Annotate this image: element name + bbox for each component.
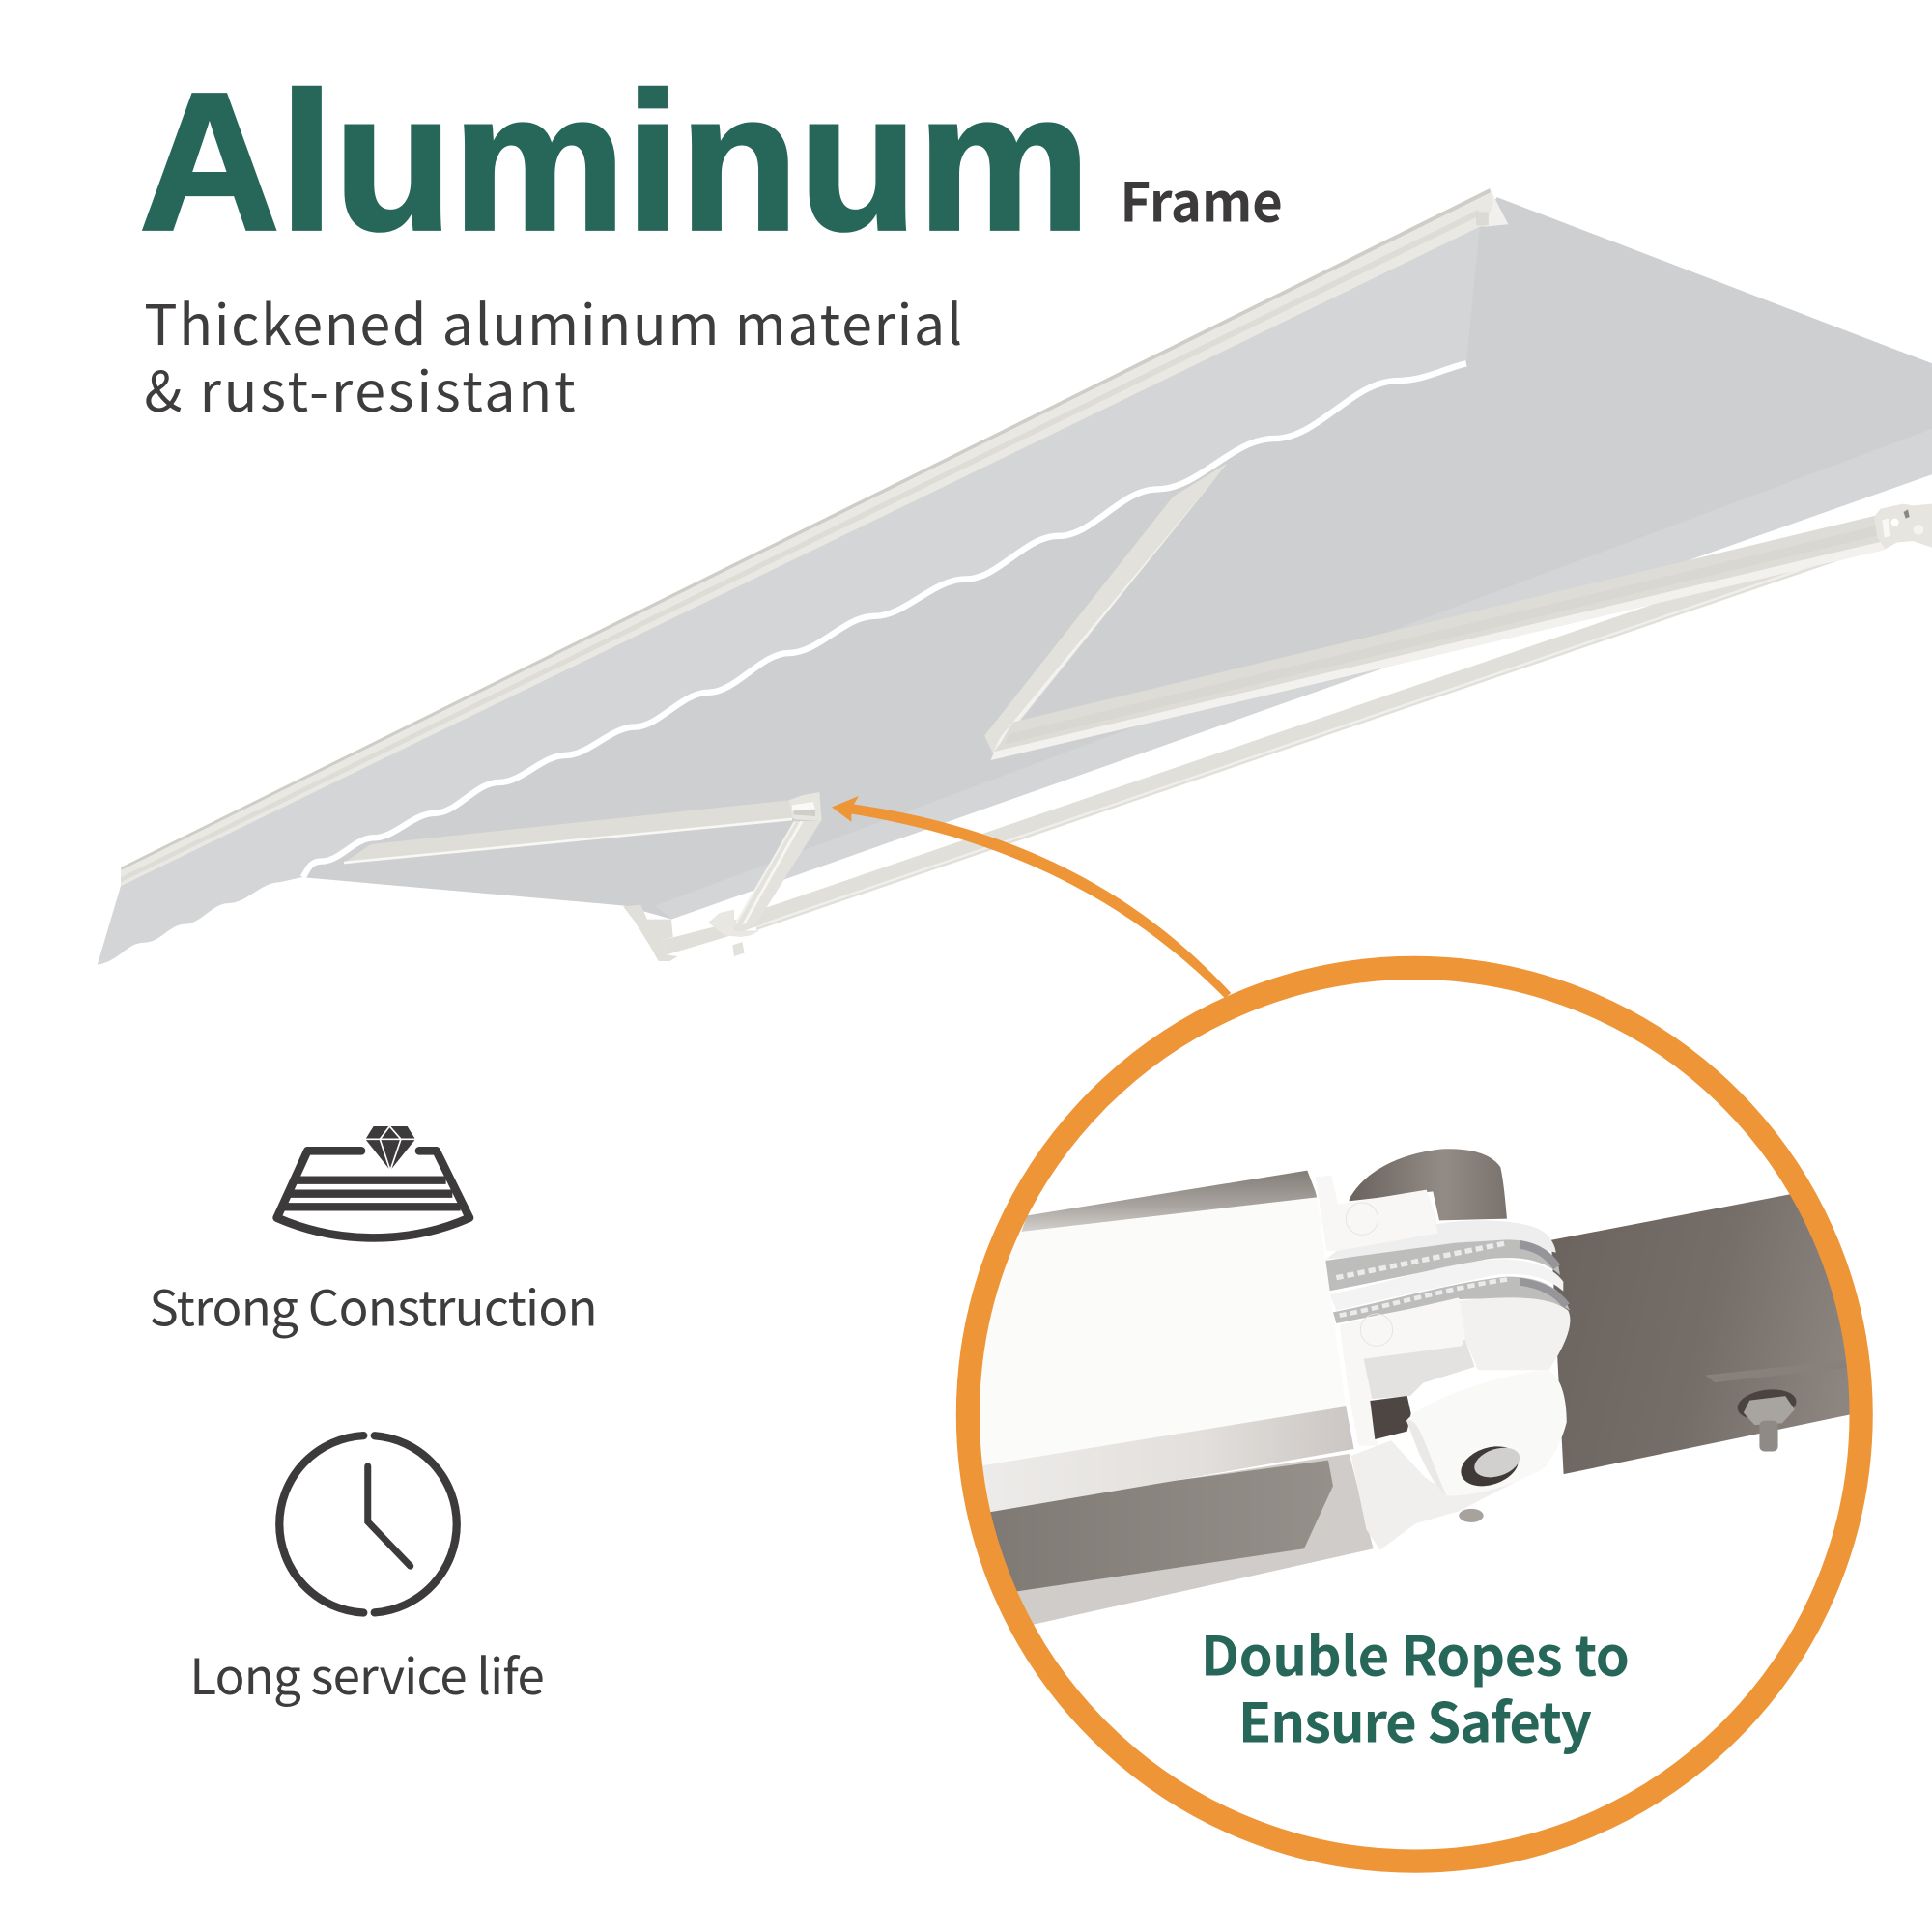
label: long service life: Long service life [189,1637,545,1709]
lower rail [754,525,1886,930]
zoom photo of elbow joint [973,1149,1878,1625]
joint plates and steel ropes [1316,1149,1570,1446]
description: & rust-resistant [144,347,576,428]
icon: clock [279,1435,457,1613]
caption: double ropes: Ensure Safety [1238,1681,1592,1759]
mount plate [732,942,745,956]
elbow [789,792,822,821]
strut [732,821,821,930]
left arm [344,800,792,864]
title: Aluminum: Aluminum [139,51,1091,270]
awning fabric [98,197,1932,965]
dark gap [1370,1396,1411,1439]
label: strong construction: Strong Construction [149,1268,598,1340]
gray disc [1350,1149,1507,1220]
wall bracket [623,905,678,961]
orange ring [968,968,1861,1861]
caption: double ropes [1201,1614,1630,1759]
right gray bar [1459,1194,1878,1522]
description: Thickened aluminum material [144,280,962,361]
white roller [1406,1370,1567,1495]
hex nut [1737,1389,1797,1451]
rope one [1325,1239,1560,1292]
arrow to elbow joint [832,796,1231,998]
top face [1021,1171,1317,1234]
front face [1020,1197,1330,1291]
right elbow joint [1874,504,1932,549]
icon: diamond [365,1126,415,1171]
bottom rail end [662,911,763,954]
roller bolt [1461,1446,1519,1486]
right arm strut [984,464,1227,754]
rope two [1333,1277,1570,1323]
bottom face [976,1406,1354,1514]
lower gray arm [979,1454,1374,1625]
awning illustration [98,188,1932,965]
description [144,280,962,428]
mount cluster [708,910,760,937]
left arm with strut, bracket and mount [344,792,822,961]
wavy gap between valance and canopy [303,363,1466,877]
icon: strong construction [277,1126,469,1237]
white arm box [973,1171,1374,1625]
middle rib [1330,1259,1563,1311]
caption: double ropes: Double Ropes to [1201,1614,1630,1692]
upper plate [1326,1220,1556,1259]
subtitle: Frame: Frame [1120,160,1283,239]
small screw [1459,1509,1484,1522]
lower lobe [1459,1297,1570,1370]
front bar [121,188,1508,886]
upper clip [1316,1176,1437,1251]
lower bracket [1351,1440,1548,1550]
lower clip [1340,1297,1465,1446]
under clip shade [1364,1340,1475,1399]
right arm [991,515,1886,760]
